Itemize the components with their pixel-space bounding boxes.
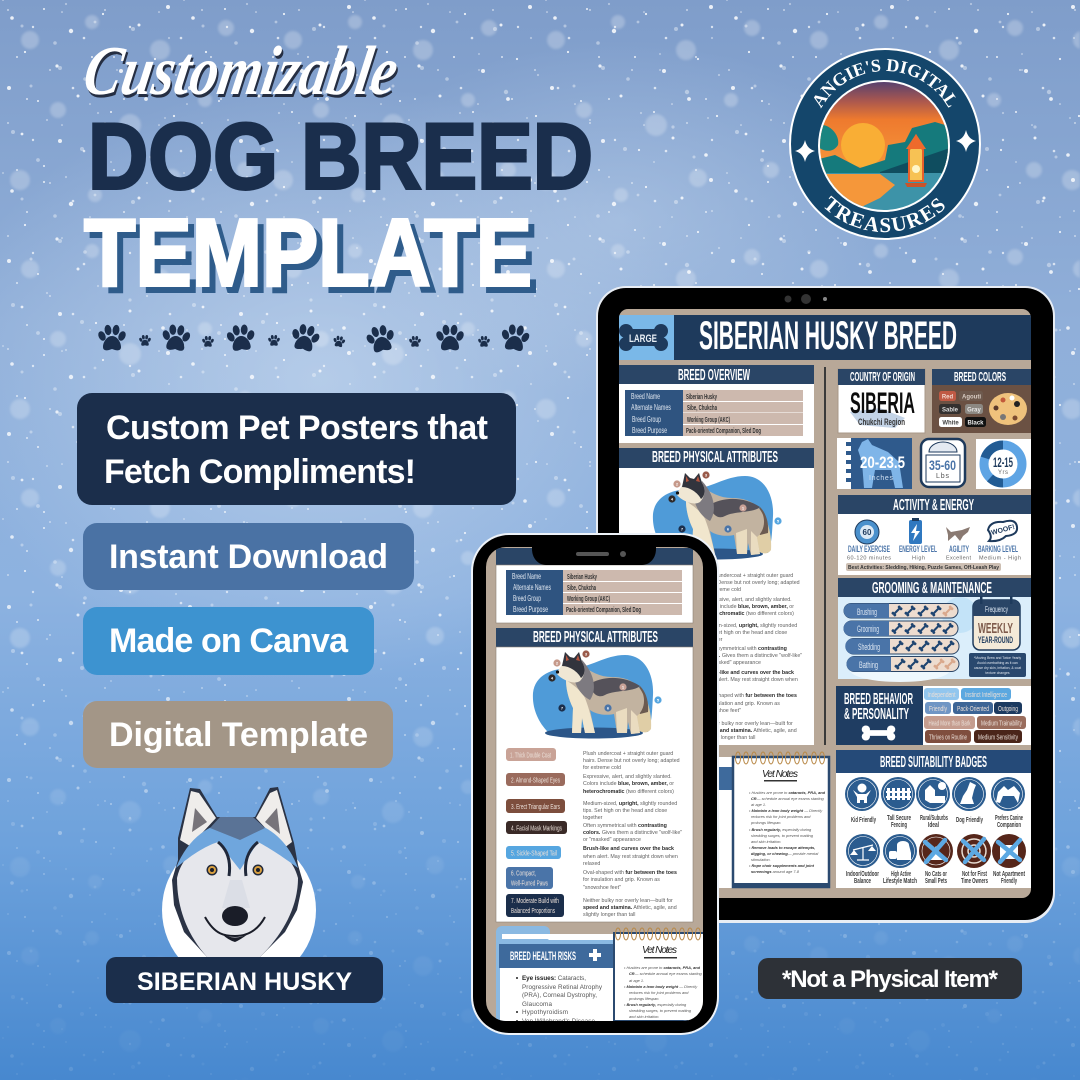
attribute descriptions: together xyxy=(583,815,603,821)
attribute descriptions: tips. Set high on the head and close xyxy=(583,808,667,814)
notebook: phone vet notes: • Huskies are prone to cataracts, PRA, and xyxy=(624,965,701,970)
note: not a physical item xyxy=(758,958,1022,999)
illustration: husky with blue blob: 5 xyxy=(657,698,660,702)
panel: activity and energy: DAILY EXERCISE xyxy=(848,544,890,554)
panel: breed physical attributes: 5 xyxy=(777,518,780,524)
attribute labels: 7. Moderate Build with xyxy=(511,898,559,905)
notebook: tablet vet notes: • Brush regularly, especially during xyxy=(749,827,812,832)
badge: prefers canine companion: Prefers Canine xyxy=(995,813,1023,822)
notebook: tablet vet notes: and skin irritation. xyxy=(751,839,782,844)
poster header xyxy=(619,314,1031,360)
icon: woof bubble xyxy=(988,521,1017,541)
panel: breed physical attributes: Colors include blue, brown, amber, or xyxy=(703,604,794,610)
panel: activity and energy: Excellent xyxy=(946,556,971,562)
heading: Customizable: Customizable xyxy=(80,35,405,113)
illustration: husky with blue blob: 1 xyxy=(622,684,625,690)
badge: no cats or small pets xyxy=(919,834,953,885)
panel: breed physical attributes: for insulation and grip. Known as xyxy=(703,701,780,707)
notebook: tablet vet notes: digging, or chewing— provide mental xyxy=(751,851,818,856)
attribute descriptions xyxy=(583,751,682,918)
illustration: husky with blue blob: 4 xyxy=(551,676,554,680)
panel: phone overview table: Working Group (AKC) xyxy=(567,594,610,603)
badge: kid friendly xyxy=(845,777,879,824)
badge: not for first time owners xyxy=(957,834,991,885)
panel: breed overview: Sibe, Chukcha xyxy=(687,403,717,412)
badge: dog friendly: Dog Friendly xyxy=(956,815,983,824)
panel: breed behavior and personality: Medium Trainability xyxy=(981,720,1022,728)
panel: phone overview table: Alternate Names xyxy=(513,583,551,592)
notebook: phone vet notes: at age 1. xyxy=(629,978,644,983)
attribute labels: 5. Sickle-Shaped Tail xyxy=(511,850,557,858)
panel: breed behavior and personality: & PERSONALITY xyxy=(844,706,909,723)
panel: breed physical attributes: 4 xyxy=(671,496,674,502)
notebook: phone vet notes: and skin irritation. xyxy=(629,1014,660,1019)
notebook: tablet vet notes: • Rope chair supplements and joint xyxy=(749,863,815,868)
grooming meter: shedding: Shedding xyxy=(858,642,880,652)
panel: breed colors: Black xyxy=(967,420,984,426)
attribute descriptions: or "masked" appearance xyxy=(583,837,641,843)
calendar: weekly frequency: WEEKLY xyxy=(978,620,1013,637)
panel: breed colors: Red xyxy=(942,394,953,400)
attribute descriptions: Plush undercoat + straight outer guard xyxy=(583,751,673,757)
panel: breed physical attributes: slightly longer than tall xyxy=(703,735,755,741)
notebook: tablet vet notes: CR— schedule annual eye exams starting xyxy=(751,796,825,801)
badge: not apartment friendly: Friendly xyxy=(1001,876,1017,885)
panel: breed overview: Breed Group xyxy=(632,415,661,424)
panel: breed physical attributes: Brush-like and curves over the back xyxy=(703,670,794,676)
badge: high active lifestyle match: Lifestyle Match xyxy=(883,876,917,885)
panel: breed behavior and personality: Thrives on Routine xyxy=(929,734,967,742)
notebook: tablet vet notes: • Huskies are prone to cataracts, PRA, and xyxy=(749,790,826,795)
panel: breed physical attributes: 6 xyxy=(727,526,730,532)
panel: breed colors: White xyxy=(942,420,959,426)
notebook: tablet vet notes: prolongs lifespan. xyxy=(750,820,782,825)
badge: indoor outdoor balance: Indoor/Outdoor xyxy=(846,869,879,878)
illustration: husky with blue blob: 2 xyxy=(556,660,559,666)
panel: breed colors: Gray xyxy=(967,408,981,414)
panel: activity and energy: High xyxy=(912,556,925,562)
panel: breed overview: BREED OVERVIEW xyxy=(678,367,750,384)
badge: not for first time owners: Time Owners xyxy=(961,876,988,885)
attribute descriptions: Often symmetrical with contrasting xyxy=(583,823,667,829)
panel: breed physical attributes: speed and stamina. Athletic, agile, and xyxy=(703,728,797,734)
tablet mockup xyxy=(596,286,1055,923)
panel: activity and energy: BARKING LEVEL xyxy=(978,544,1018,554)
panel: phone physical attributes: BREED PHYSICAL ATTRIBUTES xyxy=(533,629,658,646)
badge: prefers canine companion: Companion xyxy=(997,820,1021,829)
notebook: tablet vet notes: screenings around age 7-8 xyxy=(751,869,800,874)
panel: activity and energy: ENERGY LEVEL xyxy=(899,544,937,554)
phone mockup xyxy=(471,533,719,1035)
panel: breed physical attributes: or "masked" appearance xyxy=(703,660,761,666)
panel: breed health risks: Von Willebrand's Disease xyxy=(522,1018,595,1025)
heading: Customizable: Customizable xyxy=(78,32,404,110)
stat: weight scale: 35-60 xyxy=(929,457,956,473)
notebook: phone vet notes: • Maintain a lean body weight — Directly xyxy=(624,984,698,989)
panel: breed suitability badges xyxy=(836,750,1031,888)
notebook: phone vet notes: reduces risk for joint problems and xyxy=(629,990,689,995)
panel: breed health risks: Eye issues: Cataracts, xyxy=(522,975,586,982)
badge: not apartment friendly xyxy=(992,834,1026,885)
panel: breed behavior and personality: Independent xyxy=(928,692,956,699)
stat: lifespan: 12-15 xyxy=(993,454,1013,470)
panel: phone overview table: Siberian Husky xyxy=(567,572,597,581)
stat: weight scale xyxy=(921,439,965,487)
logo: angie's digital treasures: TREASURES xyxy=(824,196,945,232)
notebook: tablet vet notes: stimulation. xyxy=(751,857,771,862)
attribute descriptions: Neither bulky nor overly lean—built for xyxy=(583,898,673,904)
badge: rural suburbs ideal: Ideal xyxy=(928,820,939,829)
panel: breed health risks: Glaucoma xyxy=(522,1001,552,1008)
note: grooming tips: cause dry skin, irritation, & coat xyxy=(974,666,1021,670)
panel: breed overview: Pack-oriented Companion, Sled Dog xyxy=(686,426,761,435)
tablet screen xyxy=(619,309,1031,898)
attribute descriptions: "snowshoe feet" xyxy=(583,885,621,891)
notebook: phone vet notes: prolongs lifespan. xyxy=(628,996,660,1001)
panel: phone overview table: Breed Purpose xyxy=(513,605,548,614)
label: siberian husky xyxy=(106,957,383,1003)
phone notch xyxy=(532,535,656,565)
panel: tablet health risks (mostly hidden) xyxy=(719,757,732,888)
panel: breed health risks: BREED HEALTH RISKS xyxy=(510,949,576,963)
attribute descriptions: when alert. May rest straight down when xyxy=(583,854,678,860)
notebook: tablet vet notes: • Remove loads to escape attempts, xyxy=(749,845,815,850)
badge: made on canva: Made on Canva xyxy=(109,622,349,660)
grooming meter: grooming: Grooming xyxy=(857,624,879,634)
attribute descriptions: for extreme cold xyxy=(583,765,621,771)
logo: angie's digital treasures xyxy=(789,48,981,240)
badge: tall secure fencing: Tall Secure xyxy=(887,813,911,822)
attribute descriptions: Colors include blue, brown, amber, or xyxy=(583,781,674,787)
panel: breed physical attributes: Plush undercoat + straight outer guard xyxy=(703,573,793,579)
attribute labels: 2. Almond-Shaped Eyes xyxy=(511,778,560,784)
attribute descriptions: Medium-sized, upright, slightly rounded xyxy=(583,801,677,807)
panel: breed colors: BREED COLORS xyxy=(954,369,1006,384)
attribute descriptions: Oval-shaped with fur between the toes xyxy=(583,870,677,876)
panel: breed behavior and personality: Head More than Bark xyxy=(928,720,971,728)
icon: woof bubble: WOOF! xyxy=(991,524,1016,537)
calendar: weekly frequency xyxy=(973,596,1020,650)
heading: TEMPLATE: TEMPLATE xyxy=(90,206,538,312)
panel: breed health risks xyxy=(496,926,614,1025)
panel: breed physical attributes: Neither bulky nor overly lean—built for xyxy=(703,721,793,727)
panel: activity and energy xyxy=(838,495,1031,575)
attribute labels: 6. Compact, xyxy=(511,870,536,878)
attribute labels: 1. Thick Double Coat xyxy=(510,752,551,760)
note: grooming tips: *Moving Brew and Twice Yearly xyxy=(974,656,1021,660)
attribute descriptions: for insulation and grip. Known as xyxy=(583,877,660,883)
panel: breed behavior and personality: Friendly xyxy=(929,706,947,713)
panel: breed behavior and personality: Pack-Oriented xyxy=(957,706,989,713)
panel: activity and energy: ACTIVITY & ENERGY xyxy=(893,497,974,514)
panel: breed physical attributes: colors. Gives them a distinctive "wolf-like" xyxy=(703,653,802,659)
notebook: tablet vet notes: • Maintain a lean body weight — Directly xyxy=(749,808,823,813)
panel: breed overview xyxy=(619,365,814,443)
badge: made on canva xyxy=(83,607,374,675)
panel: phone overview table: Breed Group xyxy=(513,594,541,603)
attribute descriptions: hairs. Dense but not overly long; adapted xyxy=(583,758,680,764)
badge: no cats or small pets: Small Pets xyxy=(925,876,947,885)
badge: high active lifestyle match: High Active xyxy=(891,869,911,878)
logo: angie's digital treasures: ANGIE'S DIGITAL xyxy=(814,59,956,108)
attribute labels: Well-Furred Paws xyxy=(511,880,548,888)
badge: indoor outdoor balance xyxy=(846,834,880,885)
badge: kid friendly: Kid Friendly xyxy=(851,815,876,824)
phone screen xyxy=(486,547,706,1025)
illustration: husky with blue blob: 3 xyxy=(585,652,588,656)
stat: height xyxy=(837,438,912,489)
attribute descriptions: slightly longer than tall xyxy=(583,912,635,918)
stat: weight scale: Lbs xyxy=(936,473,950,480)
attribute descriptions: Brush-like and curves over the back xyxy=(583,846,674,852)
panel: phone overview table: Breed Name xyxy=(512,572,541,581)
panel: breed overview: Breed Name xyxy=(631,392,660,401)
callout: custom pet posters: Fetch Compliments! xyxy=(104,453,416,491)
notebook: tablet vet notes: Vet Notes xyxy=(762,769,798,780)
panel: breed colors: Sable xyxy=(942,408,959,414)
calendar: weekly frequency: YEAR-ROUND xyxy=(978,635,1013,645)
badge: not apartment friendly: Not Apartment xyxy=(993,869,1025,878)
attribute labels xyxy=(506,748,567,917)
notebook: phone vet notes: shedding surges, to prevent matting xyxy=(629,1008,692,1013)
grooming meter: bathing: Bathing xyxy=(859,660,878,670)
illustration: husky head xyxy=(162,787,316,987)
panel: breed physical attributes: "snowshoe feet" xyxy=(703,708,741,714)
badge: digital template xyxy=(83,701,393,768)
panel: breed behavior and personality: BREED BEHAVIOR xyxy=(844,691,913,708)
illustration: husky with blue blob: 7 xyxy=(561,706,564,710)
panel: breed overview: Working Group (AKC) xyxy=(687,415,730,424)
heading: DOG BREED: DOG BREED xyxy=(88,104,593,208)
attribute descriptions: relaxed xyxy=(583,861,600,867)
stat: height: Inches xyxy=(869,475,894,482)
stat: lifespan: Yrs xyxy=(998,470,1008,476)
panel: breed physical attributes: 1 xyxy=(742,506,745,510)
panel: breed health risks: Progressive Retinal Atrophy xyxy=(522,984,603,991)
callout: custom pet posters xyxy=(77,393,516,505)
panel: activity and energy: Best Activities: Sledding, Hiking, Puzzle Games, Off-Leash Play xyxy=(848,565,999,571)
icon: stopwatch: 60 xyxy=(863,528,872,537)
notebook: phone vet notes: CR— schedule annual eye exams starting xyxy=(629,971,703,976)
callout: custom pet posters: Custom Pet Posters that xyxy=(106,409,488,447)
attribute descriptions: speed and stamina. Athletic, agile, and xyxy=(583,905,677,911)
grooming meter: brushing: Brushing xyxy=(857,607,877,617)
icon: running dog xyxy=(946,527,970,541)
panel: country of origin: Chukchi Region xyxy=(858,417,905,428)
panel: breed physical attributes: 2 xyxy=(676,482,679,486)
panel: breed physical attributes: when alert. May rest straight down when xyxy=(703,677,798,683)
illustration: husky with blue blob xyxy=(533,650,662,738)
panel: breed physical attributes: 7 xyxy=(681,526,684,532)
attribute descriptions: colors. Gives them a distinctive "wolf-like" xyxy=(583,830,682,836)
panel: breed physical attributes: tips. Set high on the head and close xyxy=(703,630,787,636)
badge: dog friendly xyxy=(952,777,986,824)
notebook: tablet vet notes xyxy=(733,752,829,888)
notebook: phone vet notes: Vet Notes xyxy=(642,945,677,956)
panel: phone physical attributes xyxy=(496,628,693,922)
panel: breed behavior and personality: Medium Sensitivity xyxy=(978,734,1018,742)
panel: grooming and maintenance xyxy=(838,578,1031,682)
note: grooming tips: texture changes xyxy=(985,671,1010,675)
panel: breed behavior and personality: Outgoing xyxy=(998,706,1018,713)
panel: breed physical attributes: Oval-shaped with fur between the toes xyxy=(703,693,797,699)
illustration: husky with blue blob: 6 xyxy=(607,706,610,710)
panel: phone overview table: Pack-oriented Companion, Sled Dog xyxy=(566,605,641,614)
panel: breed behavior and personality: Instinct Intelligence xyxy=(965,692,1007,699)
badge: tall secure fencing: Fencing xyxy=(891,820,907,829)
attribute labels: 3. Erect Triangular Ears xyxy=(511,804,560,811)
panel: breed overview: Alternate Names xyxy=(631,403,671,412)
panel: breed health risks: (PRA), Corneal Dystrophy, xyxy=(522,992,597,999)
badge: rural suburbs ideal xyxy=(916,777,950,829)
attribute labels: 4. Facial Mask Markings xyxy=(511,826,562,832)
stat: height: 20-23.5 xyxy=(860,453,905,472)
badge: digital template: Digital Template xyxy=(109,716,368,754)
panel: breed health risks: Hypothyroidism xyxy=(522,1009,568,1016)
icon: battery xyxy=(909,518,922,544)
panel: breed physical attributes: together xyxy=(703,637,723,643)
note: not a physical item: *Not a Physical Item* xyxy=(782,966,999,993)
notebook: phone vet notes xyxy=(614,928,706,1021)
badge: indoor outdoor balance: Balance xyxy=(854,876,871,885)
panel: activity and energy: Medium - High xyxy=(979,556,1021,562)
grooming meter: grooming xyxy=(844,621,958,636)
grooming meter: shedding xyxy=(845,638,959,654)
notebook: tablet vet notes: at age 1. xyxy=(751,802,766,807)
attribute descriptions: Expressive, alert, and slightly slanted. xyxy=(583,774,672,780)
panel: phone overview table xyxy=(496,565,693,623)
panel: activity and energy: AGILITY xyxy=(949,544,969,554)
grooming meter: brushing xyxy=(844,604,958,618)
badge: not for first time owners: Not for First xyxy=(962,869,987,878)
panel: breed physical attributes: hairs. Dense but not overly long; adapted xyxy=(703,580,800,586)
attribute descriptions: heterochromatic (two different colors) xyxy=(583,789,674,795)
panel: country of origin: COUNTRY OF ORIGIN xyxy=(850,369,915,384)
notebook: tablet vet notes: shedding surges, to prevent matting xyxy=(751,833,814,838)
badge: instant download xyxy=(83,523,414,590)
panel: breed physical attributes: for extreme cold xyxy=(703,587,741,593)
panel: breed physical attributes: Often symmetrical with contrasting xyxy=(703,646,787,652)
calendar: weekly frequency: Frequency xyxy=(985,605,1008,614)
label: siberian husky: SIBERIAN HUSKY xyxy=(137,968,352,996)
panel: breed overview: Siberian Husky xyxy=(686,392,717,401)
panel: breed physical attributes: BREED PHYSICAL ATTRIBUTES xyxy=(652,449,778,466)
panel: country of origin: SIBERIA xyxy=(850,387,915,420)
panel: activity and energy: 60-120 minutes xyxy=(847,556,891,562)
panel: breed colors: Agouti xyxy=(962,394,981,400)
panel: country of origin xyxy=(838,369,925,433)
panel: breed behavior and personality xyxy=(836,686,1031,745)
badge: rural suburbs ideal: Rural/Suburbs xyxy=(920,813,948,822)
panel: breed physical attributes: Medium-sized, upright, slightly rounded xyxy=(703,623,797,629)
panel: breed physical attributes xyxy=(619,448,814,745)
paw print row xyxy=(97,322,532,354)
badge: prefers canine companion xyxy=(991,777,1025,829)
panel: breed physical attributes: heterochromatic (two different colors) xyxy=(703,611,794,617)
poster header: LARGE xyxy=(629,333,657,345)
panel: breed physical attributes: 3 xyxy=(705,472,708,478)
badge: tall secure fencing xyxy=(881,777,915,829)
panel: breed colors xyxy=(932,369,1031,433)
stat: lifespan xyxy=(976,439,1031,489)
panel: breed physical attributes: Expressive, alert, and slightly slanted. xyxy=(703,597,792,603)
notebook: tablet vet notes: reduces risk for joint problems and xyxy=(751,814,811,819)
badge: high active lifestyle match xyxy=(883,834,917,885)
note: grooming tips xyxy=(969,653,1026,677)
badge: instant download: Instant Download xyxy=(109,538,388,576)
icon: stopwatch xyxy=(855,520,879,544)
panel: phone overview table: Sibe, Chukcha xyxy=(567,583,596,592)
badge: no cats or small pets: No Cats or xyxy=(925,869,947,878)
attribute labels: Balanced Proportions xyxy=(511,908,555,915)
grooming meter: bathing xyxy=(847,656,959,672)
note: grooming tips: Avoid overbathing as it can xyxy=(977,661,1018,665)
notebook: phone vet notes: • Brush regularly, especially during xyxy=(624,1002,687,1007)
panel: breed overview: Breed Purpose xyxy=(632,426,667,435)
heading: TEMPLATE: TEMPLATE xyxy=(84,200,532,306)
